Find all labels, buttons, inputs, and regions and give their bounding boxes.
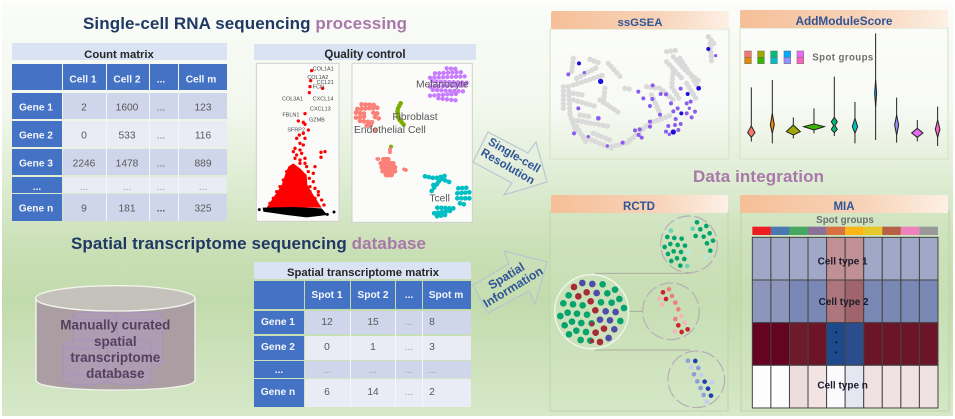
- table: count matrix: Cell 2: [113, 74, 141, 86]
- table: count matrix: Gene n: [19, 204, 53, 214]
- legend: spot groups: [745, 51, 873, 64]
- table: spatial transcriptome matrix: ...: [405, 387, 413, 398]
- table: count matrix: 1478: [116, 158, 139, 170]
- heading: quality control: Quality control: [324, 49, 406, 61]
- table: spatial transcriptome matrix: ...: [405, 342, 413, 353]
- table: count matrix: [12, 43, 227, 221]
- heatmap: cell types by spot groups: Cell type 1: [818, 256, 868, 267]
- icon: database cylinder: Manually curated: [60, 318, 170, 333]
- table: count matrix: 0: [81, 130, 87, 142]
- table: count matrix: ...: [80, 182, 88, 193]
- panel: MIA: [740, 195, 949, 411]
- table: count matrix: ...: [33, 182, 41, 193]
- table: spatial transcriptome matrix: ...: [405, 365, 413, 376]
- table: count matrix: ...: [157, 204, 165, 214]
- table: count matrix: 181: [118, 204, 136, 214]
- chart: cell type clusters: [352, 63, 472, 222]
- table: count matrix: Cell m: [186, 74, 216, 86]
- table: spatial transcriptome matrix: Spot m: [429, 290, 463, 301]
- heatmap: cell types by spot groups: Cell type 2: [819, 297, 869, 308]
- table: spatial transcriptome matrix: Spot 1: [311, 290, 343, 301]
- chart: volcano plot: COL3A1: [282, 96, 303, 102]
- chart: volcano plot: SFRP2: [287, 127, 305, 133]
- chart: volcano plot: GZMB: [309, 117, 325, 123]
- table: spatial transcriptome matrix: ...: [405, 290, 413, 301]
- table: spatial transcriptome matrix: 15: [367, 317, 379, 328]
- table: spatial transcriptome matrix: Gene n: [261, 387, 295, 398]
- arrow: spatial information: Spatial: [486, 260, 527, 292]
- table: count matrix: Gene 3: [19, 158, 53, 170]
- chart: violin plots: [748, 33, 940, 146]
- table: spatial transcriptome matrix: Gene 1: [261, 317, 295, 328]
- table: count matrix: 533: [118, 130, 136, 142]
- legend: spot groups: Spot groups: [812, 52, 873, 63]
- table: spatial transcriptome matrix: Gene 2: [261, 342, 295, 353]
- panel: RCTD: RCTD: [623, 201, 655, 213]
- heading: data integration: Data integration: [693, 167, 824, 186]
- table: spatial transcriptome matrix: 0: [324, 342, 330, 353]
- icon: database cylinder: transcriptome: [70, 350, 161, 365]
- table: count matrix: 325: [194, 204, 212, 214]
- chart: volcano plot: CCL21: [317, 80, 334, 86]
- heading: quality control: [254, 44, 476, 61]
- table: count matrix: ...: [157, 158, 165, 170]
- arrow: spatial information: [473, 251, 547, 313]
- table: count matrix: 1600: [116, 102, 139, 114]
- heatmap: cell types by spot groups: Cell type n: [817, 380, 868, 391]
- chart: cell type clusters: Melanocyte: [416, 80, 469, 91]
- table: count matrix: 889: [194, 158, 212, 170]
- table: count matrix: Gene 2: [19, 130, 53, 142]
- chart: volcano plot: FBLN1: [282, 113, 299, 119]
- chart: volcano plot: [256, 63, 339, 221]
- icon: database cylinder: [36, 286, 195, 390]
- label: spot groups: Spot groups: [816, 215, 874, 226]
- table: count matrix: ...: [157, 74, 165, 86]
- table: spatial transcriptome matrix: ...: [369, 365, 377, 376]
- table: spatial transcriptome matrix: 8: [429, 317, 435, 328]
- table: spatial transcriptome matrix: ...: [275, 365, 283, 376]
- panel: RCTD: [550, 195, 728, 411]
- table: spatial transcriptome matrix: ...: [405, 317, 413, 328]
- chart: volcano plot: FCN: [313, 85, 324, 91]
- arrow: single-cell resolution: Single-cell: [486, 135, 543, 176]
- chart: cell type clusters: Tcell: [429, 194, 450, 205]
- chart: cell type clusters: Fibroblast: [392, 112, 438, 123]
- panel: ssGSEA: [550, 11, 729, 159]
- chart: volcano plot: CXCL13: [310, 107, 331, 113]
- heatmap: cell types by spot groups: [752, 227, 938, 408]
- title: spatial database: Spatial transcriptome sequencing database: [71, 234, 426, 253]
- arrow: spatial information: Information: [481, 264, 545, 310]
- table: count matrix: Count matrix: [84, 49, 155, 61]
- chart: volcano plot: COL1A2: [307, 75, 328, 81]
- table: spatial transcriptome matrix: ...: [428, 365, 436, 376]
- table: spatial transcriptome matrix: 3: [429, 342, 435, 353]
- table: spatial transcriptome matrix: Spatial transcriptome matrix: [287, 267, 440, 279]
- table: count matrix: ...: [157, 102, 165, 114]
- chart: ssGSEA scatter: [563, 37, 717, 149]
- table: count matrix: 123: [194, 102, 212, 114]
- table: spatial transcriptome matrix: 14: [367, 387, 379, 398]
- chart: volcano plot: CXCL14: [313, 96, 333, 102]
- table: count matrix: 2: [81, 102, 87, 114]
- table: spatial transcriptome matrix: 12: [321, 317, 333, 328]
- table: spatial transcriptome matrix: [254, 262, 471, 407]
- chart: cell type clusters: Endothelial Cell: [354, 125, 426, 136]
- table: count matrix: 2246: [73, 158, 96, 170]
- table: count matrix: 9: [81, 204, 87, 214]
- arrow: single-cell resolution: [473, 132, 547, 195]
- diagram: spatial spots deconvolution: [555, 216, 725, 408]
- table: spatial transcriptome matrix: Spot 2: [357, 290, 389, 301]
- title: single-cell processing: Single-cell RNA sequencing processing: [83, 14, 407, 33]
- panel: AddModuleScore: [740, 10, 948, 159]
- table: count matrix: 116: [195, 130, 211, 142]
- table: count matrix: ...: [199, 182, 207, 193]
- chart: volcano plot: COL1A1: [313, 66, 334, 72]
- panel: ssGSEA: ssGSEA: [618, 17, 662, 29]
- icon: database cylinder: database: [86, 366, 145, 381]
- table: count matrix: ...: [123, 182, 131, 193]
- table: count matrix: Gene 1: [19, 102, 53, 114]
- table: count matrix: ...: [157, 130, 165, 142]
- table: count matrix: ...: [157, 182, 165, 193]
- panel: MIA: MIA: [833, 201, 855, 213]
- table: spatial transcriptome matrix: 1: [370, 342, 376, 353]
- icon: database cylinder: spatial: [94, 334, 137, 349]
- table: count matrix: Cell 1: [69, 74, 97, 86]
- table: spatial transcriptome matrix: 2: [429, 387, 435, 398]
- table: spatial transcriptome matrix: 6: [324, 387, 330, 398]
- panel: AddModuleScore: AddModuleScore: [795, 14, 893, 28]
- arrow: single-cell resolution: Resolution: [479, 146, 537, 187]
- table: spatial transcriptome matrix: ...: [323, 365, 331, 376]
